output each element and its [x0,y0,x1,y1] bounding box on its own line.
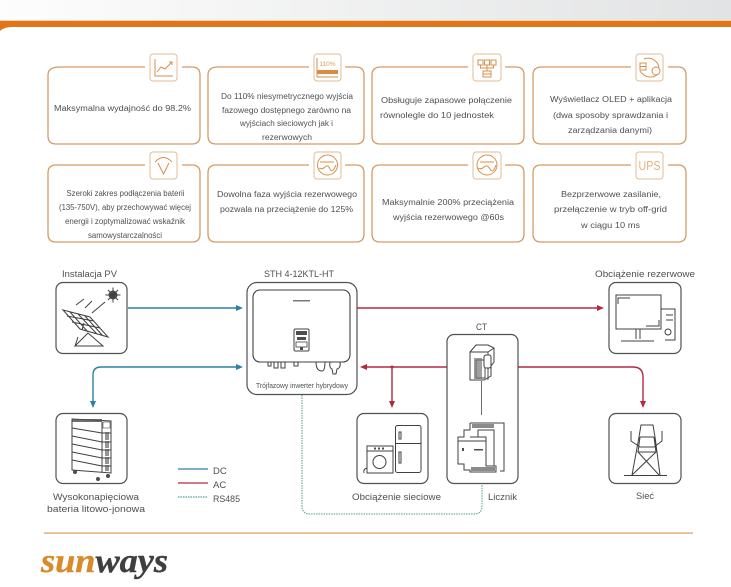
panel: CT and meter [447,322,518,484]
text: parallel connection [380,95,512,120]
arrow: CT to grid [518,367,646,408]
legend: RS485 [213,494,240,505]
text: 110 percent description [221,92,354,142]
text: 110 percent description: wyjściach sieciowych jak i [239,119,333,128]
text: 200 percent overload: Maksymalnie 200% przeciążenia [382,198,515,207]
icon: refrigerator [396,426,421,472]
text: 125 percent overload: pozwala na przeciążenie do 125% [220,205,353,214]
icon: sun [106,288,120,302]
text: battery range [59,189,191,240]
legend: DC [213,466,227,477]
label: grid load: Obciążenie sieciowe [352,492,441,502]
text: UPS: w ciągu 10 ms [580,221,640,230]
text: 125 percent overload: Dowolna faza wyjścia rezerwowego [217,190,358,199]
inverter body [253,290,350,374]
panel: 110% unbalanced output [208,54,364,144]
icon: overload wave [314,152,341,179]
icon: current transformer [470,345,494,380]
text: UPS: Bezprzerwowe zasilanie, [561,190,661,199]
text: battery range: (135-750V), aby przechowywać więcej [59,203,191,212]
label: grid: Sieć [636,491,655,501]
panel: CT and meter: CT [476,322,487,332]
icon: solar panel [63,299,108,346]
text: 125 percent overload [217,190,358,214]
arrow: inverter to battery [90,364,243,408]
icon: washing machine [364,446,393,473]
text: UPS: przełączenie w tryb off-grid [554,205,667,214]
text: 110 percent description: fazowego dostępnego zarówno na [222,106,352,115]
panel: backup load: Obciążenie rezerwowe [595,269,695,279]
icon: voltage range [150,152,177,179]
label: battery [47,492,145,514]
text: UPS [554,190,667,230]
icon: transmission tower [624,425,667,476]
icon: computer [616,295,675,341]
text: parallel connection: równolegle do 10 jednostek [380,110,495,120]
CT to meter wire [480,381,482,415]
icon: meter [458,423,504,472]
text: battery range: Szeroki zakres podłączenia baterii [66,189,185,198]
icon: display and app [636,54,663,81]
panel: 200 percent overload [372,152,524,242]
label: meter: Licznik [488,492,518,502]
panel: max efficiency [48,54,200,144]
panel: UPS [533,152,686,242]
text: 110 percent description: rezerwowych [262,133,312,142]
panel: grid [609,414,681,501]
text: max efficiency: Maksymalna wydajność do 98.2% [54,104,191,113]
panel: 125 percent overload [208,152,364,242]
legend [178,466,240,505]
text: battery range: samowystarczalności [88,231,162,240]
inverter caption: Trójfazowy inwerter hybrydowy [256,381,348,390]
text: OLED and app: Wyświetlacz OLED + aplikacja [550,95,673,104]
footer divider [44,532,693,534]
logo: sunways: sunways [40,543,168,580]
icon: UPS [636,152,663,179]
arrow: PV to inverter [128,305,243,311]
panel: wide battery range [48,152,200,242]
text: 200 percent overload: wyjścia rezerwowego @60s [392,213,504,222]
panel: battery [47,414,145,514]
panel: backup load [595,269,695,354]
text: OLED and app: (dwa sposoby sprawdzania i [553,111,668,120]
arrow: CT to inverter and grid load [360,364,447,408]
panel: hybrid inverter [247,269,357,394]
icon: 110 percent [314,54,341,81]
header band [0,0,731,31]
text: 110 percent description: Do 110% niesymetrycznego wyjścia [221,92,354,101]
panel: PV array [56,269,127,354]
icon: UPS: UPS [638,159,660,173]
panel: grid load [352,414,441,502]
text: battery range: energii i zoptymalizować wskaźnik [65,217,186,226]
label: battery: Wysokonapięciowa [53,492,139,502]
RS485 dotted link [302,395,482,514]
panel: parallel connection [372,54,524,144]
icon: growth chart [150,54,177,81]
icon: battery stack [72,419,111,481]
panel: PV array: Instalacja PV [62,269,117,279]
panel: OLED and app [533,54,686,144]
text: OLED and app: zarządzania danymi) [568,126,652,135]
panel: hybrid inverter: STH 4-12KTL-HT [264,269,335,279]
icon: 110 percent: 110% [319,61,336,68]
arrow: inverter to backup load [357,305,604,311]
icon: parallel units [473,54,501,81]
label: battery: bateria litowo-jonowa [47,504,145,514]
legend: AC [213,480,226,491]
text: 200 percent overload [382,198,515,222]
text: parallel connection: Obsługuje zapasowe połączenie [381,95,512,105]
icon: overload wave 200 [473,152,501,179]
text: OLED and app [550,95,673,135]
